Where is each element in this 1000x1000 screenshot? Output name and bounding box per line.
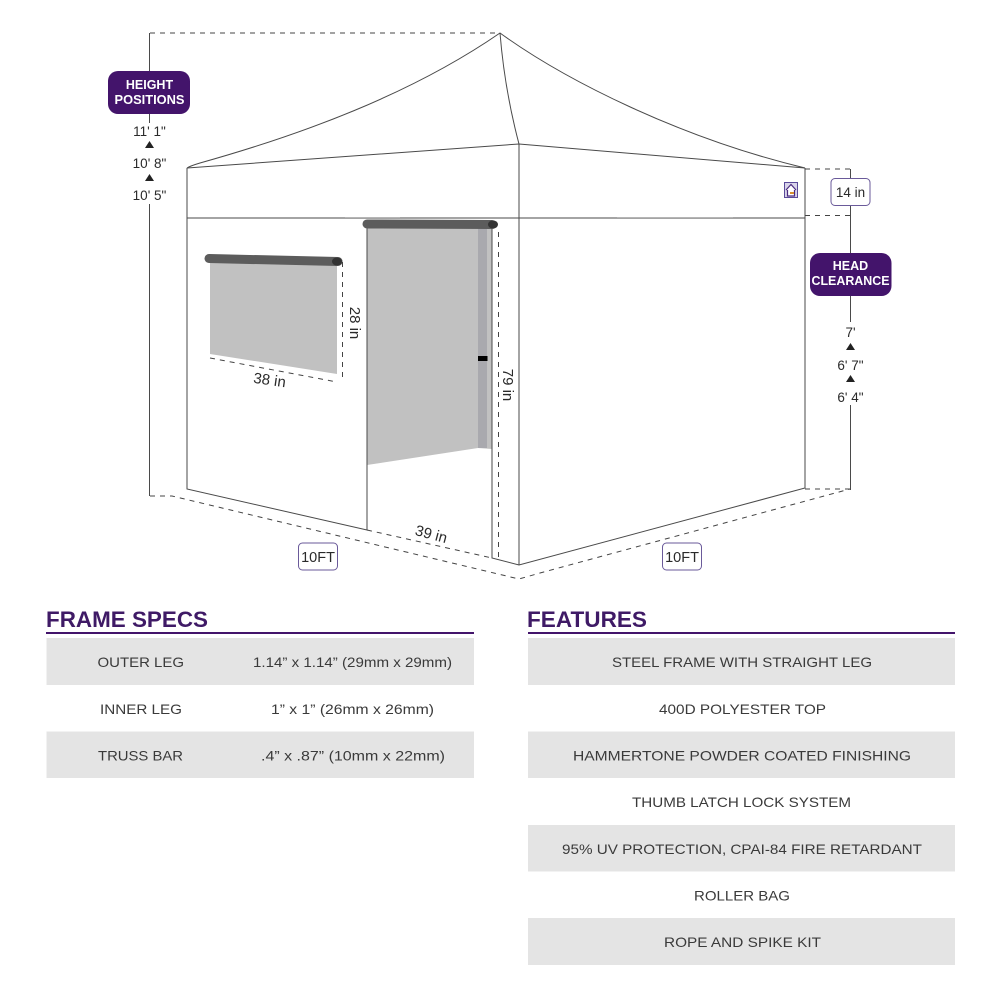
row: outer leg: 1.14” x 1.14” (29mm x 29mm) xyxy=(253,654,452,670)
heading: features: FEATURES xyxy=(527,607,647,632)
row: uv protection xyxy=(528,825,955,872)
head clearance values: 7' xyxy=(845,325,856,340)
window dimensions: 28 in xyxy=(346,307,363,339)
door dimensions xyxy=(367,232,516,558)
panel: features xyxy=(527,607,955,965)
tent valance and walls xyxy=(187,144,805,565)
height dimension line xyxy=(150,33,500,496)
row: outer leg xyxy=(46,638,474,685)
badge: height positions xyxy=(108,71,190,114)
row: uv protection: 95% UV PROTECTION, CPAI-84 FIRE RETARDANT xyxy=(562,841,922,857)
row: rope and spike kit: ROPE AND SPIKE KIT xyxy=(664,934,821,950)
row: steel frame xyxy=(528,638,955,685)
row: roller bag: ROLLER BAG xyxy=(694,888,790,904)
label: left 10FT xyxy=(298,543,338,570)
label: right 10FT: 10FT xyxy=(665,550,699,566)
panel: frame specs xyxy=(46,607,474,778)
row: inner leg: 1” x 1” (26mm x 26mm) xyxy=(271,701,434,717)
row: polyester top: 400D POLYESTER TOP xyxy=(659,701,826,717)
window dimensions: 38 in xyxy=(252,370,287,391)
row: truss bar: TRUSS BAR xyxy=(98,748,183,764)
badge: height positions: HEIGHT xyxy=(126,78,173,92)
badge: height positions: POSITIONS xyxy=(114,93,184,107)
row: hammertone finish: HAMMERTONE POWDER COATED FINISHING xyxy=(573,748,911,764)
row: hammertone finish xyxy=(528,732,955,778)
label: left 10FT: 10FT xyxy=(301,550,335,566)
row: steel frame: STEEL FRAME WITH STRAIGHT LEG xyxy=(612,654,872,670)
tent roof xyxy=(187,33,805,168)
row: thumb latch: THUMB LATCH LOCK SYSTEM xyxy=(632,794,851,810)
badge: head clearance: HEAD xyxy=(833,259,868,273)
badge: head clearance xyxy=(810,253,892,296)
height values: 11' 1" xyxy=(133,124,166,139)
door dimensions: 79 in xyxy=(499,369,516,401)
height values: 10' 8" xyxy=(133,156,167,171)
label: right 10FT xyxy=(662,543,702,570)
head clearance values: 6' 7" xyxy=(837,358,864,373)
base dimension lines xyxy=(150,489,850,579)
row: inner leg xyxy=(100,701,434,717)
row: truss bar: .4” x .87” (10mm x 22mm) xyxy=(261,748,445,764)
height values xyxy=(133,124,167,203)
door dimensions: 39 in xyxy=(413,522,449,547)
window panel xyxy=(209,258,342,374)
row: inner leg: INNER LEG xyxy=(100,701,182,717)
label: 14 in xyxy=(831,178,870,206)
heading: frame specs: FRAME SPECS xyxy=(46,607,208,632)
row: rope and spike kit xyxy=(528,918,955,965)
door panel xyxy=(367,220,498,465)
row: outer leg: OUTER LEG xyxy=(98,654,184,670)
badge: head clearance: CLEARANCE xyxy=(812,274,890,288)
head clearance values: 6' 4" xyxy=(837,390,864,405)
height values: 10' 5" xyxy=(133,188,167,203)
tent diagram xyxy=(187,33,805,565)
row: truss bar xyxy=(46,732,474,778)
window dimensions xyxy=(210,262,363,391)
head clearance values xyxy=(837,325,864,405)
icon: logo house xyxy=(784,182,798,198)
label: 14 in: 14 in xyxy=(836,185,865,200)
head clearance dimension line xyxy=(805,169,850,490)
